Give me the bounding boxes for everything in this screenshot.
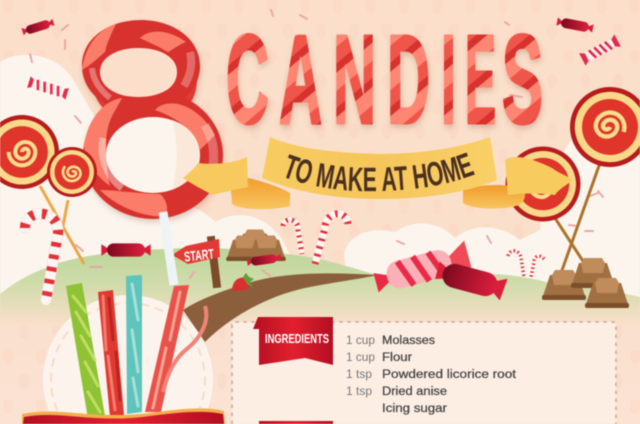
ingredients list: Icing sugar (382, 403, 447, 415)
candy: top-left dark red (21, 18, 55, 36)
ingredients list: 1 cup (346, 335, 375, 347)
candy: red by chocolate (247, 253, 281, 267)
candy: top-right dark red (556, 17, 594, 33)
ingredients list: 1 cup (346, 352, 375, 364)
strawberry (232, 273, 254, 291)
chocolate road (183, 273, 378, 342)
licorice: teal (126, 275, 142, 414)
left white clouds (0, 55, 292, 300)
text: S (502, 9, 543, 150)
right white clouds (344, 109, 640, 305)
white lollipop stick (163, 212, 174, 285)
chocolate pile: centre (226, 230, 286, 261)
banner: subtitle ribbon (182, 136, 573, 210)
candy: big pink wrapped (371, 241, 472, 294)
subtitle text: TO MAKE AT HOME (286, 152, 476, 192)
title: CANDIES: E (465, 9, 496, 150)
lollipop: left large (0, 115, 59, 189)
ingredients ribbon: INGREDIENTS (265, 331, 329, 346)
panel: ingredients (232, 317, 616, 424)
licorice: red (98, 290, 124, 417)
lollipop: right small (492, 133, 594, 235)
title: CANDIES: N (333, 9, 376, 150)
candy: dark red wrapped (434, 260, 508, 301)
candy: red on left hill (101, 243, 151, 257)
signpost: START: START (183, 246, 215, 265)
title: CANDIES (226, 9, 543, 150)
green hills (0, 248, 640, 325)
licorice: coral (145, 285, 189, 412)
ingredients list (346, 335, 517, 415)
candy cane: right pair (508, 251, 544, 277)
title: CANDIES: I (441, 9, 456, 150)
licorice: green (66, 283, 105, 419)
ingredients list: Powdered licorice root (382, 369, 517, 381)
ribbon: bottom red (22, 408, 225, 424)
title: CANDIES: C (226, 9, 269, 150)
lollipop: right large (559, 76, 640, 178)
licorice: pink whip (163, 306, 206, 392)
candy cane: centre pair (283, 214, 348, 264)
title: CANDIES: D (387, 9, 430, 150)
ingredients list: 1 tsp (346, 369, 372, 381)
upper counter fill (100, 48, 177, 97)
candy: pink striped top-left (27, 76, 69, 100)
signpost: START (172, 236, 221, 288)
lollipop: left small (37, 137, 107, 207)
ingredients ribbon (253, 317, 333, 365)
next section ribbon (259, 421, 333, 424)
decorative sprinkles (30, 10, 603, 278)
ingredients list: Flour (382, 352, 412, 364)
candy cane: left large (25, 214, 58, 300)
candy: pink striped top-right (579, 34, 621, 66)
top ring of the 8 (82, 20, 200, 113)
plate (43, 295, 213, 424)
ingredients list: Molasses (382, 335, 435, 347)
licorice twists (73, 284, 180, 412)
lollipop sticks (40, 163, 600, 276)
bottom ring of the 8 (83, 91, 223, 219)
ingredients list: Dried anise (382, 386, 447, 398)
ingredients list: 1 tsp (346, 386, 372, 398)
chocolate pile: right (542, 258, 629, 308)
title: CANDIES: A (279, 9, 322, 150)
